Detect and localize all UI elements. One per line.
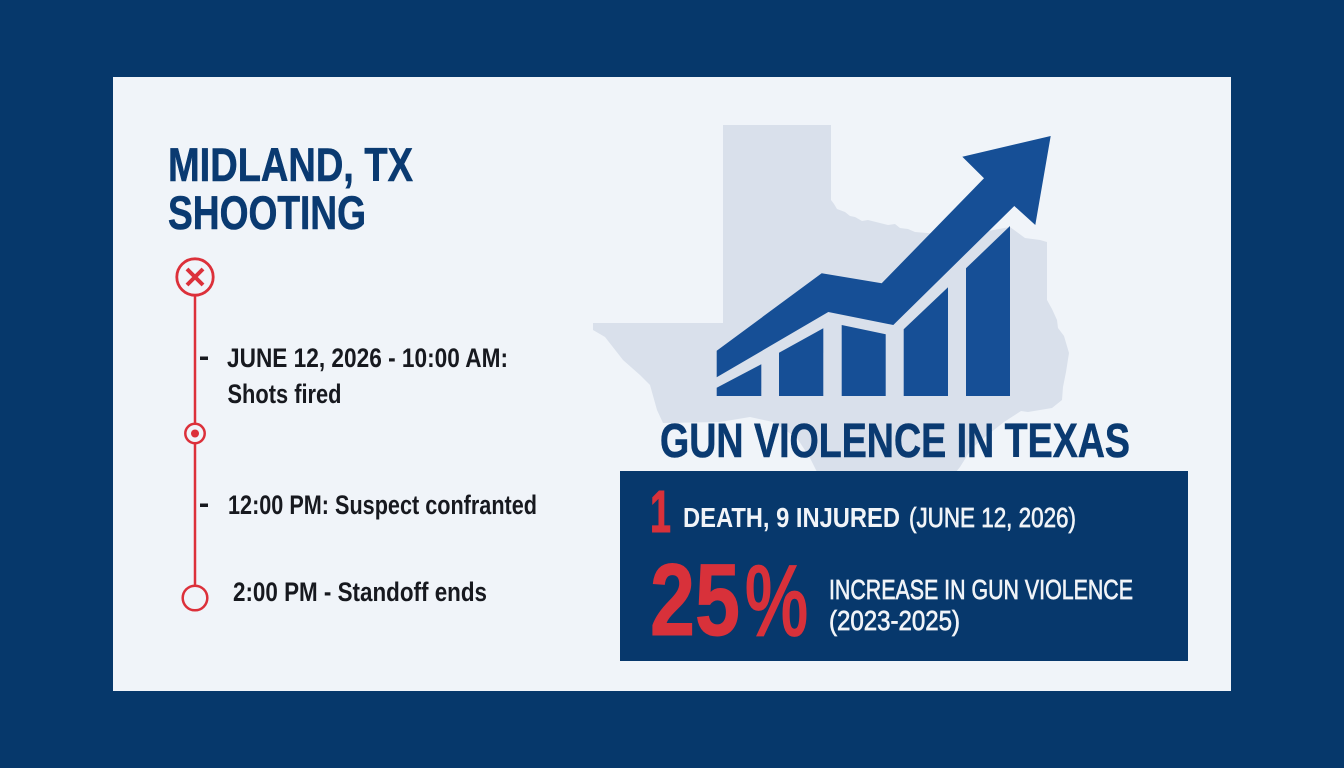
panel: main white card [113,77,1231,691]
stat: deaths and injured: DEATH, 9 INJURED [683,502,900,533]
timeline entry: shots fired [200,343,508,409]
stat: deaths and injured: (JUNE 12, 2026) [909,502,1076,533]
heading: gun violence in Texas: GUN VIOLENCE IN TEXAS [660,415,1130,468]
trend arrow [717,136,1051,377]
icon: end marker [183,586,207,610]
panel: statistics [620,471,1188,661]
stat: percent increase: % [745,545,808,656]
icon: X marker [177,259,213,295]
timeline [177,259,537,610]
stat: percent increase [650,543,1133,657]
timeline entry: shots fired: Shots fired [228,379,342,409]
stat: percent increase: (2023-2025) [829,605,960,636]
bar 5 [966,226,1010,396]
timeline entry: suspect confronted: 12:00 PM: Suspect confranted [228,490,537,520]
stat: percent increase: 25 [650,543,740,657]
Texas map silhouette [593,125,1069,472]
icon: dot marker [185,424,205,443]
chart: rising bars and arrow [717,136,1051,396]
stat: percent increase: INCREASE IN GUN VIOLENCE [829,574,1133,605]
timeline line [194,295,196,586]
title: MIDLAND, TX [168,138,413,191]
bar 3 [842,325,886,396]
title [168,138,413,239]
stat: deaths and injured: 1 [650,479,671,545]
stat: deaths and injured [650,479,1076,545]
bar 1 [717,364,761,396]
title: SHOOTING [168,186,366,239]
timeline entry: standoff ends: 2:00 PM - Standoff ends [233,577,487,607]
timeline entry: shots fired: JUNE 12, 2026 - 10:00 AM: [227,343,508,373]
bar 4 [904,287,948,396]
bar 2 [779,328,823,396]
